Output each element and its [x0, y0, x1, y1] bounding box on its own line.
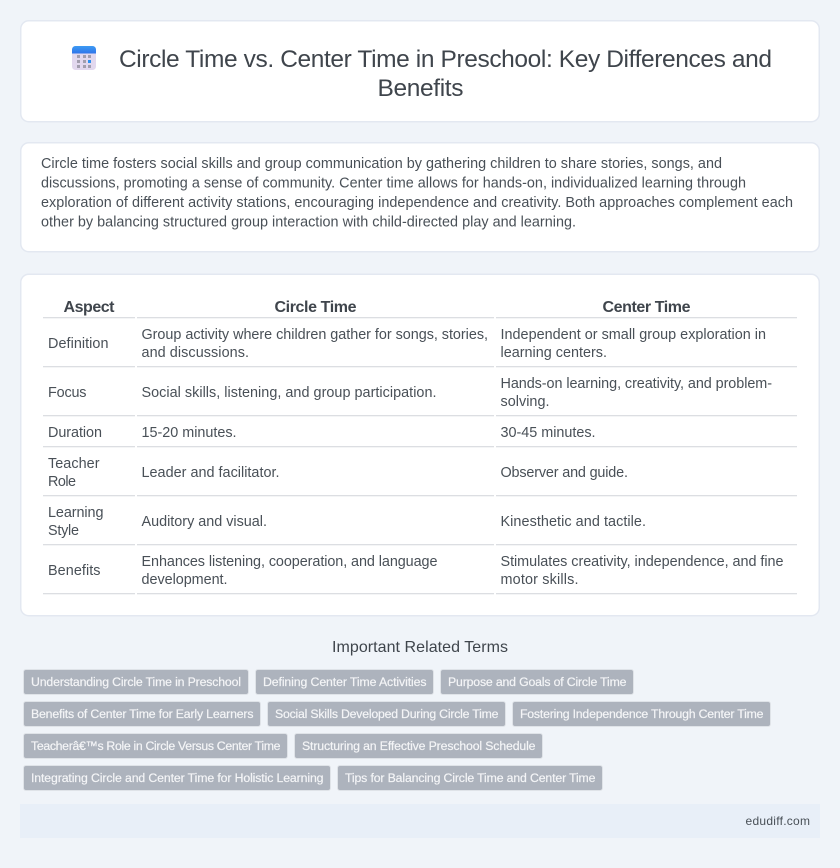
row: learning style: Style: [48, 523, 79, 539]
row: benefits: Enhances listening, cooperation, and language: [142, 554, 438, 570]
tag: structuring schedule: [294, 734, 542, 758]
tag: tips for balancing: [338, 766, 602, 790]
row: teacher role: Leader and facilitator.: [142, 465, 280, 481]
tag: understanding circle time: [24, 670, 248, 694]
heading: important related terms: Important Related Terms: [332, 639, 508, 656]
tag: integrating circle and center time: Integrating Circle and Center Time for Holistic Learning: [31, 771, 324, 785]
icon: calendar: [72, 46, 96, 70]
tag: defining center time: [256, 670, 434, 694]
table header: Circle Time: [274, 299, 357, 316]
panel: introduction text: [21, 143, 819, 252]
panel: comparison table: [21, 274, 819, 616]
row: duration: 15-20 minutes.: [142, 425, 236, 441]
title: [119, 46, 772, 102]
tag: benefits of center time: [24, 702, 260, 726]
row: definition: Group activity where children gather for songs, stories,: [142, 327, 488, 343]
title: Benefits: [378, 75, 464, 102]
table header: Center Time: [602, 299, 691, 316]
tag: understanding circle time: Understanding Circle Time in Preschool: [31, 675, 241, 689]
tag: structuring schedule: Structuring an Effective Preschool Schedule: [302, 739, 536, 753]
row: teacher role: Role: [48, 474, 76, 490]
row: focus: Hands-on learning, creativity, and problem-: [500, 376, 772, 392]
intro paragraph: other by balancing structured group interaction with child-directed play and learning.: [41, 214, 576, 230]
related terms tags: [24, 670, 770, 790]
row: learning style: Kinesthetic and tactile.: [500, 514, 646, 530]
tag: purpose and goals: Purpose and Goals of Circle Time: [448, 675, 627, 689]
table header: [64, 299, 691, 316]
row: definition: learning centers.: [500, 345, 607, 361]
tag: integrating circle and center time: [24, 766, 330, 790]
footer brand: edudiff.com: [746, 814, 810, 828]
row: focus: [48, 376, 772, 410]
tag: social skills: [268, 702, 506, 726]
tag: fostering independence: [512, 702, 770, 726]
tag: teacher's role: Teacherâ€™s Role in Circle Versus Center Time: [31, 739, 281, 753]
row: focus: Social skills, listening, and group participation.: [142, 385, 436, 401]
row: definition: [48, 327, 766, 361]
row: focus: Focus: [48, 385, 86, 401]
row: benefits: Stimulates creativity, independence, and fine: [500, 554, 784, 570]
row: duration: [48, 425, 596, 441]
row: definition: Definition: [48, 336, 108, 352]
tag: teacher's role: [24, 734, 288, 758]
intro paragraph: exploration of different activity stations, encouraging independence and creativity. Both approaches complement each: [41, 195, 793, 211]
tag: tips for balancing: Tips for Balancing Circle Time and Center Time: [345, 771, 596, 785]
row: benefits: [48, 554, 784, 588]
row: duration: Duration: [48, 425, 102, 441]
row: teacher role: [48, 456, 628, 490]
tag: fostering independence: Fostering Independence Through Center Time: [520, 707, 764, 721]
tag: purpose and goals: [440, 670, 634, 694]
table header: Aspect: [64, 299, 115, 316]
intro paragraph: discussions, promoting a sense of community. Center time allows for hands-on, individualized learning through: [41, 176, 746, 192]
panel: title header: [21, 21, 819, 122]
tag: benefits of center time: Benefits of Center Time for Early Learners: [31, 707, 254, 721]
row: definition: Independent or small group exploration in: [500, 327, 766, 343]
row: learning style: Auditory and visual.: [142, 514, 267, 530]
row: learning style: [48, 505, 646, 539]
intro paragraph: Circle time fosters social skills and group communication by gathering children to share stories, songs, and: [41, 156, 722, 172]
row: teacher role: Teacher: [48, 456, 100, 472]
row: teacher role: Observer and guide.: [500, 465, 628, 481]
tag: defining center time: Defining Center Time Activities: [263, 675, 426, 689]
row: benefits: development.: [142, 572, 228, 588]
footer: [20, 804, 820, 838]
row: focus: solving.: [500, 394, 550, 410]
title: Circle Time vs. Center Time in Preschool: Key Differences and: [119, 46, 772, 73]
row: benefits: motor skills.: [500, 572, 578, 588]
row: definition: and discussions.: [142, 345, 249, 361]
intro paragraph: [41, 156, 793, 230]
row: learning style: Learning: [48, 505, 104, 521]
tag: social skills: Social Skills Developed During Circle Time: [275, 707, 499, 721]
table row lines: [43, 317, 797, 594]
row: benefits: Benefits: [48, 563, 100, 579]
row: duration: 30-45 minutes.: [500, 425, 596, 441]
